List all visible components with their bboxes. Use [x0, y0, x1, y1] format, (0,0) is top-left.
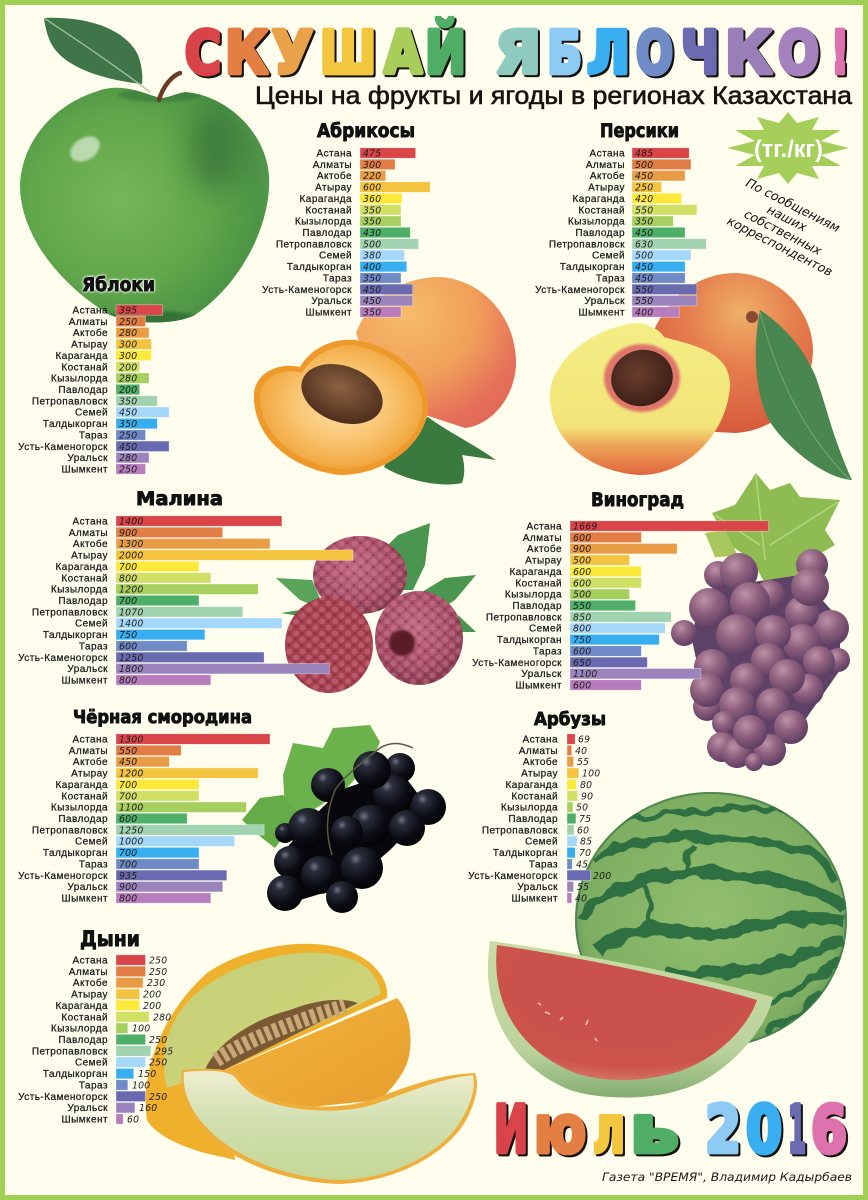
chart: grapes: Кызылорда — [505, 590, 562, 601]
chart: apples: Шымкент — [61, 464, 108, 476]
chart: peaches: Уральск — [584, 296, 625, 307]
chart: melons: Атырау — [71, 990, 108, 1001]
chart: black currants: 550 — [119, 746, 137, 757]
chart: apricots: Атырау — [315, 183, 352, 194]
chart: apricots: Семей — [319, 251, 352, 262]
chart: raspberries: Костанай — [61, 573, 108, 584]
chart: grapes: Петропавловск — [486, 612, 562, 623]
chart: watermelons: Кызылорда — [501, 803, 558, 814]
date: July 2016: ь — [630, 1093, 679, 1168]
chart: apples: Кызылорда — [51, 374, 108, 385]
chart: apples: 200 — [119, 385, 137, 396]
chart: peaches: Павлодар — [575, 228, 625, 239]
chart: raspberries: 800 — [119, 573, 137, 584]
chart: grapes: 600 — [573, 533, 591, 544]
chart: watermelons: 80 — [580, 780, 592, 791]
chart: apples: Павлодар — [58, 385, 108, 396]
chart: apples — [18, 305, 169, 476]
chart: raspberries: Уральск — [67, 664, 108, 675]
chart: apples: 200 — [119, 362, 137, 373]
chart: peaches: Актобе — [590, 170, 625, 182]
chart: watermelons: Астана — [523, 734, 558, 746]
chart: raspberries: 1070 — [119, 607, 143, 618]
title: Л — [587, 18, 630, 87]
chart: apricots: 350 — [363, 274, 381, 284]
chart: melons: 100 — [132, 1024, 150, 1035]
chart: watermelons: 60 — [577, 825, 589, 836]
chart: raspberries: 900 — [119, 528, 137, 539]
chart: apples: Атырау — [71, 340, 108, 351]
date: July 2016 — [494, 1093, 847, 1168]
chart: melons: 200 — [143, 990, 161, 1001]
chart: apricots: 430 — [363, 228, 381, 239]
chart: watermelons: Шымкент — [511, 894, 558, 904]
chart: apples: 250 — [119, 464, 137, 476]
chart: watermelons: Талдыкорган — [493, 848, 558, 859]
chart: raspberries: 1800 — [119, 664, 143, 675]
credit: Газета "ВРЕМЯ", Владимир Кадырбаев — [602, 1170, 852, 1184]
heading: melons: Дыни — [80, 927, 140, 951]
chart: black currants: 600 — [119, 814, 137, 825]
image: grapes — [671, 473, 850, 771]
subtitle: Цены на фрукты и ягоды в регионах Казахстана — [255, 82, 852, 110]
chart: black currants — [18, 734, 270, 904]
chart: apricots: 350 — [363, 217, 381, 228]
chart: black currants: 450 — [119, 757, 137, 768]
chart: watermelons: Павлодар — [508, 814, 558, 825]
chart: apricots: 380 — [363, 251, 381, 262]
chart: peaches: 450 — [635, 228, 653, 239]
chart: apricots: 500 — [363, 239, 381, 250]
date: July 2016: ю — [534, 1093, 586, 1168]
chart: grapes: Семей — [529, 624, 562, 635]
chart: black currants: 700 — [119, 791, 137, 802]
chart: black currants: Павлодар — [58, 814, 108, 825]
chart: apples: Семей — [75, 408, 108, 419]
note: sources: корреспондентов — [725, 213, 835, 279]
chart: peaches: Петропавловск — [549, 239, 625, 250]
chart: raspberries: Шымкент — [61, 676, 108, 686]
chart: peaches: 450 — [635, 262, 653, 273]
chart: apricots: Алматы — [313, 160, 352, 171]
chart: melons: Астана — [73, 956, 108, 966]
chart: black currants: 1250 — [119, 825, 143, 836]
chart: peaches: 550 — [635, 285, 653, 296]
chart: black currants: 800 — [119, 894, 137, 904]
chart: apples: Талдыкорган — [43, 419, 108, 430]
image: peaches — [550, 273, 852, 480]
chart: peaches: Шымкент — [578, 308, 625, 318]
chart: apricots: 450 — [363, 296, 381, 307]
title: С — [185, 18, 221, 87]
chart: apricots: Павлодар — [302, 228, 352, 239]
chart: melons: Караганда — [56, 1001, 108, 1012]
chart: peaches: Астана — [590, 148, 625, 160]
chart: apricots: 350 — [363, 308, 381, 318]
chart: raspberries: 700 — [119, 562, 137, 573]
chart: melons: Костанай — [61, 1012, 108, 1023]
chart: raspberries — [18, 516, 353, 686]
chart: peaches — [535, 148, 706, 318]
chart: black currants: Семей — [75, 837, 108, 848]
chart: melons: 160 — [139, 1103, 157, 1114]
title: У — [272, 18, 313, 87]
chart: peaches: Кызылорда — [568, 217, 625, 228]
image: apricots — [254, 277, 516, 485]
chart: peaches: 550 — [635, 296, 653, 307]
chart: apples: Астана — [73, 306, 108, 316]
chart: raspberries: Павлодар — [58, 596, 108, 607]
chart: grapes: Павлодар — [512, 601, 562, 612]
chart: watermelons: Алматы — [519, 746, 558, 757]
image: watermelon slice — [488, 941, 773, 1098]
chart: apricots: 400 — [363, 262, 381, 273]
title: Я — [495, 18, 541, 87]
chart: apples: 280 — [119, 374, 137, 385]
chart: raspberries: Усть-Каменогорск — [18, 653, 108, 664]
chart: raspberries: Актобе — [73, 538, 108, 550]
image: whole watermelon — [575, 792, 847, 1048]
image: black currants — [242, 725, 446, 913]
heading: raspberries: Малина — [136, 488, 223, 510]
chart: black currants: Усть-Каменогорск — [18, 871, 108, 882]
title: ! — [831, 18, 849, 87]
chart: black currants: Костанай — [61, 791, 108, 802]
image: raspberries — [276, 523, 476, 693]
chart: peaches: 500 — [635, 160, 653, 171]
chart: peaches: 250 — [635, 183, 653, 194]
chart: apricots: 450 — [363, 285, 381, 296]
chart: watermelons: Атырау — [521, 769, 558, 780]
chart: apricots: 300 — [363, 160, 381, 171]
chart: melons: Шымкент — [61, 1114, 108, 1126]
title — [185, 18, 849, 87]
chart: black currants: Шымкент — [61, 894, 108, 904]
chart: apricots: Усть-Каменогорск — [262, 285, 352, 296]
chart: apricots — [262, 148, 430, 318]
chart: raspberries: Караганда — [56, 562, 108, 573]
chart: apples: 350 — [119, 396, 137, 407]
chart: raspberries: 2000 — [119, 551, 143, 562]
chart: black currants: 700 — [119, 780, 137, 791]
chart: black currants: 1300 — [119, 734, 143, 746]
chart: watermelons: 55 — [577, 882, 589, 893]
date: July 2016: 2 — [705, 1093, 741, 1168]
chart: grapes: 750 — [573, 635, 591, 646]
note: sources: По сообщениям — [743, 175, 843, 235]
title: А — [384, 18, 422, 87]
chart: melons: Семей — [75, 1058, 108, 1069]
chart: raspberries: Тараз — [79, 642, 108, 652]
chart: watermelons: 45 — [576, 860, 588, 870]
chart: watermelons: 70 — [579, 848, 591, 859]
heading: black currants: Чёрная смородина — [73, 707, 252, 728]
chart: apricots: Тараз — [323, 274, 352, 284]
chart: peaches: Усть-Каменогорск — [535, 285, 625, 296]
chart: grapes: Костанай — [515, 578, 562, 589]
chart: black currants: Талдыкорган — [43, 848, 108, 859]
chart: melons: 250 — [149, 956, 167, 966]
chart: apples: Усть-Каменогорск — [18, 442, 108, 453]
chart: raspberries: Семей — [75, 619, 108, 630]
chart: melons: Усть-Каменогорск — [18, 1092, 108, 1103]
chart: apples: Петропавловск — [32, 396, 108, 407]
heading: watermelons: Арбузы — [534, 709, 606, 730]
chart: melons: Павлодар — [58, 1035, 108, 1046]
chart: apricots: Уральск — [311, 296, 352, 307]
chart: apples: 300 — [119, 340, 137, 351]
chart: melons: 100 — [132, 1080, 150, 1092]
heading: peaches: Персики — [600, 120, 679, 142]
chart: grapes: Актобе — [527, 543, 562, 555]
chart: watermelons: 55 — [577, 757, 589, 768]
chart: black currants: 700 — [119, 848, 137, 859]
chart: black currants: 900 — [119, 882, 137, 893]
chart: grapes: 600 — [573, 646, 591, 658]
chart: grapes: Алматы — [523, 533, 562, 544]
chart: apples: 300 — [119, 351, 137, 362]
chart: black currants: Атырау — [71, 769, 108, 780]
chart: melons: 250 — [149, 967, 167, 978]
chart: grapes: Атырау — [525, 556, 562, 567]
chart: melons: Петропавловск — [32, 1046, 108, 1057]
chart: apples: 280 — [119, 328, 137, 339]
chart: black currants: Караганда — [56, 780, 108, 791]
title: К — [225, 18, 268, 87]
title: Ч — [681, 18, 719, 87]
title: Й — [425, 18, 466, 87]
chart: peaches: Караганда — [573, 194, 625, 205]
heading: apples: Яблоки — [82, 274, 155, 296]
chart: black currants: Алматы — [69, 746, 108, 757]
chart: black currants: Уральск — [67, 882, 108, 893]
title: Ш — [320, 18, 376, 87]
chart: apricots: Караганда — [300, 194, 352, 205]
chart: watermelons: Костанай — [511, 791, 558, 802]
chart: peaches: 630 — [635, 239, 653, 250]
chart: peaches: Тараз — [596, 274, 625, 284]
heading: apricots: Абрикосы — [317, 120, 415, 142]
chart: watermelons: Караганда — [506, 780, 558, 791]
chart: watermelons: 40 — [575, 894, 587, 904]
chart: grapes: 600 — [573, 578, 591, 589]
chart: peaches: Атырау — [588, 183, 625, 194]
chart: grapes: 600 — [573, 680, 591, 692]
chart: black currants: 1200 — [119, 769, 143, 780]
chart: black currants: Астана — [73, 734, 108, 746]
chart: grapes: 850 — [573, 612, 591, 623]
chart: peaches: Талдыкорган — [560, 262, 625, 273]
chart: grapes: 1669 — [573, 522, 597, 532]
date: July 2016: л — [593, 1093, 625, 1168]
chart: watermelons: 69 — [578, 734, 590, 746]
chart: apricots: 350 — [363, 205, 381, 216]
chart: melons: 250 — [149, 1092, 167, 1103]
chart: apples: 450 — [119, 442, 137, 453]
chart: grapes — [472, 521, 769, 692]
chart: melons: 60 — [127, 1114, 139, 1126]
chart: raspberries: 1250 — [119, 653, 143, 664]
chart: watermelons: 90 — [581, 791, 593, 802]
chart: apricots: Талдыкорган — [287, 262, 352, 273]
chart: black currants: 700 — [119, 860, 137, 870]
chart: watermelons: 85 — [580, 837, 592, 848]
chart: grapes: 650 — [573, 658, 591, 669]
chart: raspberries: 700 — [119, 596, 137, 607]
chart: raspberries: Астана — [73, 516, 108, 528]
chart: melons: 150 — [138, 1069, 156, 1080]
chart: apricots: 600 — [363, 183, 381, 194]
chart: peaches: 500 — [635, 251, 653, 262]
chart: peaches: 450 — [635, 274, 653, 284]
chart: watermelons: Уральск — [517, 882, 558, 893]
chart: grapes: Усть-Каменогорск — [472, 658, 562, 669]
chart: raspberries: 750 — [119, 630, 137, 641]
chart: grapes: 600 — [573, 567, 591, 578]
note: sources: наших — [765, 202, 810, 235]
chart: apricots: Актобе — [317, 170, 352, 182]
chart: melons: 250 — [149, 1058, 167, 1069]
title: К — [725, 18, 772, 87]
chart: grapes: 800 — [573, 624, 591, 635]
chart: apples: 450 — [119, 408, 137, 419]
chart: black currants: 1100 — [119, 803, 143, 814]
chart: raspberries: 800 — [119, 676, 137, 686]
chart: black currants: 935 — [119, 871, 137, 882]
chart: peaches: 350 — [635, 217, 653, 228]
chart: grapes: 900 — [573, 544, 591, 555]
chart: apples: Тараз — [79, 430, 108, 442]
chart: apricots: 475 — [363, 148, 381, 160]
date: July 2016: 0 — [746, 1093, 782, 1168]
chart: raspberries: 1200 — [119, 585, 143, 596]
chart: apples: Актобе — [73, 327, 108, 339]
chart: peaches: Алматы — [586, 160, 625, 171]
chart: grapes: 500 — [573, 590, 591, 601]
chart: melons: 280 — [153, 1012, 171, 1023]
chart: peaches: 420 — [635, 194, 653, 205]
date: July 2016: 1 — [788, 1093, 806, 1168]
chart: melons: 200 — [143, 1001, 161, 1012]
chart: black currants: 1000 — [119, 837, 143, 848]
chart: apples: Костанай — [61, 362, 108, 373]
chart: apples: 350 — [119, 419, 137, 430]
chart: raspberries: 1400 — [119, 516, 143, 528]
date: July 2016: И — [494, 1093, 528, 1168]
chart: watermelons: Семей — [525, 837, 558, 848]
chart: grapes: Тараз — [533, 646, 562, 658]
chart: apples: Уральск — [67, 453, 108, 464]
chart: melons: Кызылорда — [51, 1024, 108, 1035]
chart: raspberries: Кызылорда — [51, 585, 108, 596]
chart: raspberries: Атырау — [71, 551, 108, 562]
chart: grapes: Уральск — [521, 669, 562, 680]
title: Б — [547, 18, 582, 87]
title: О — [778, 18, 819, 87]
chart: watermelons: 100 — [582, 769, 600, 780]
chart: apples: Караганда — [56, 351, 108, 362]
chart: raspberries: Талдыкорган — [43, 630, 108, 641]
chart: apples: Алматы — [69, 317, 108, 328]
chart: peaches: 550 — [635, 205, 653, 216]
chart: melons: Уральск — [67, 1103, 108, 1114]
chart: grapes: 1100 — [573, 669, 597, 680]
chart: watermelons: 40 — [575, 746, 587, 757]
chart: black currants: Тараз — [79, 860, 108, 870]
chart: apples: 250 — [119, 430, 137, 442]
chart: melons: Алматы — [69, 967, 108, 978]
chart: black currants: Петропавловск — [32, 825, 108, 836]
chart: watermelons: Петропавловск — [482, 825, 558, 836]
chart: melons: Тараз — [79, 1080, 108, 1092]
chart: peaches: 400 — [635, 308, 653, 318]
image: green apple — [20, 18, 269, 325]
image: melon — [146, 944, 477, 1184]
chart: melons: 295 — [155, 1046, 173, 1057]
chart: apricots: Кызылорда — [295, 217, 352, 228]
chart: apricots: 360 — [363, 194, 381, 205]
chart: grapes: Астана — [527, 522, 562, 532]
chart: apples: 280 — [119, 453, 137, 464]
chart: raspberries: Алматы — [69, 528, 108, 539]
chart: watermelons: 200 — [593, 871, 611, 882]
chart: grapes: 500 — [573, 556, 591, 567]
chart: grapes: Талдыкорган — [497, 635, 562, 646]
note: sources — [725, 175, 843, 279]
heading: grapes: Виноград — [591, 489, 684, 511]
chart: watermelons: Тараз — [529, 860, 558, 870]
chart: melons: 230 — [147, 978, 165, 989]
chart: apricots: Костанай — [305, 205, 352, 216]
chart: black currants: Актобе — [73, 756, 108, 768]
chart: grapes: Караганда — [510, 567, 562, 578]
chart: peaches: Семей — [592, 251, 625, 262]
chart: peaches: 450 — [635, 171, 653, 182]
chart: apples: 250 — [119, 317, 137, 328]
chart: watermelons — [468, 734, 611, 904]
chart: watermelons: Усть-Каменогорск — [468, 871, 558, 882]
chart: melons: Актобе — [73, 977, 108, 989]
chart: apricots: Петропавловск — [276, 239, 352, 250]
chart: grapes: Шымкент — [515, 680, 562, 692]
badge: unit — [727, 112, 849, 184]
chart: apricots: Астана — [317, 148, 352, 160]
chart: watermelons: Актобе — [523, 756, 558, 768]
chart: watermelons: 50 — [576, 803, 588, 814]
chart: apricots: Шымкент — [305, 308, 352, 318]
chart: apricots: 220 — [363, 171, 381, 182]
chart: peaches: Костанай — [578, 205, 625, 216]
chart: apples: 395 — [119, 306, 137, 316]
chart: raspberries: 600 — [119, 642, 137, 652]
chart: melons: Талдыкорган — [43, 1069, 108, 1080]
badge: unit: (тг./кг) — [754, 136, 823, 163]
date: July 2016: 6 — [811, 1093, 847, 1168]
chart: melons: 250 — [149, 1035, 167, 1046]
note: sources: собственных — [742, 206, 825, 258]
chart: melons — [18, 955, 173, 1126]
chart: raspberries: 1400 — [119, 619, 143, 630]
chart: raspberries: Петропавловск — [32, 607, 108, 618]
chart: black currants: Кызылорда — [51, 803, 108, 814]
chart: watermelons: 75 — [579, 814, 591, 825]
chart: peaches: 485 — [635, 148, 653, 160]
chart: grapes: 550 — [573, 601, 591, 612]
title: О — [636, 18, 673, 87]
chart: raspberries: 1300 — [119, 539, 143, 550]
